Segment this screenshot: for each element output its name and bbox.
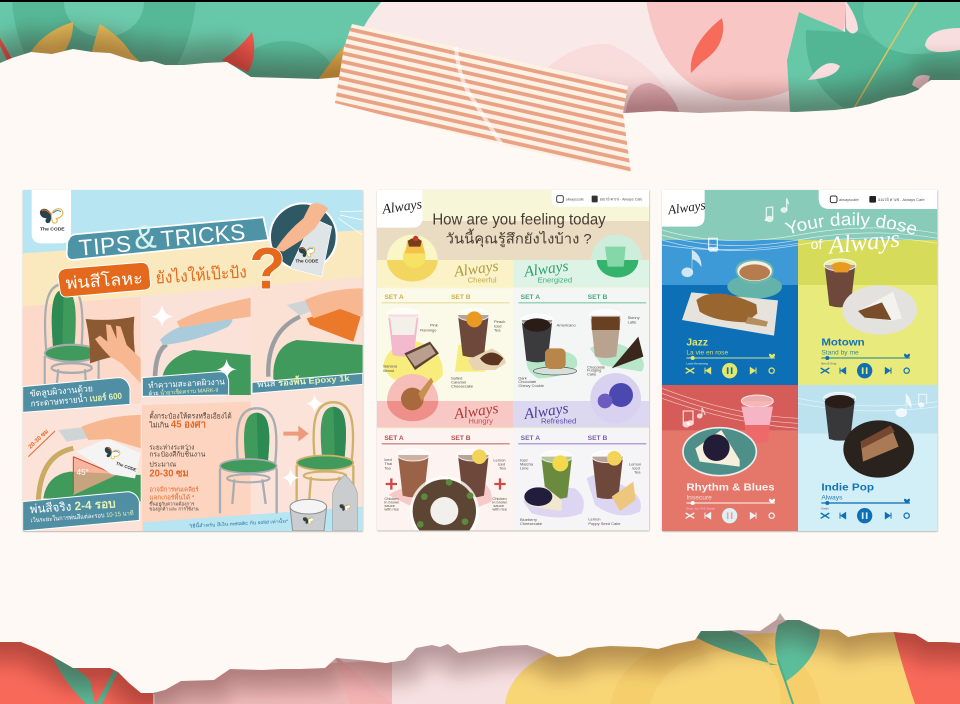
hungry and refreshed labels (384, 457, 641, 526)
hungry and refreshed labels: Chicken (492, 496, 507, 501)
washi tape (335, 24, 631, 173)
social links (819, 190, 937, 209)
step three illustration (268, 288, 363, 384)
jazz food photo (682, 259, 782, 336)
refreshed heading: Refreshed (541, 417, 576, 426)
refreshed mascot (590, 373, 641, 424)
tips and tricks banner: & (132, 218, 158, 257)
set labels and dividers: SET A (521, 294, 540, 301)
hungry and refreshed labels: with rice (492, 506, 508, 511)
spray instructions text (148, 410, 232, 513)
cheerful and energized labels: Fudging (587, 368, 601, 373)
rhythm food photo (683, 395, 773, 476)
step three caption (252, 371, 363, 393)
step four spraying illustration: The CODE (115, 461, 137, 473)
step one caption: ขัดลูบผิวงานด้วย (29, 383, 93, 400)
hungry food set (386, 449, 506, 546)
cheerful and energized labels: Americano (557, 323, 576, 328)
step one caption (23, 378, 130, 412)
spray instructions text: ตั้งกระป๋องให้ตรงหรือเอียงได้ (149, 410, 232, 420)
step two caption: ด้วย น้ำยาเช็ดคราบ MARK-II (148, 385, 219, 397)
cheerful and energized labels (383, 315, 640, 388)
hungry heading (452, 400, 499, 426)
menu background blocks (377, 190, 649, 530)
The CODE logo box (32, 190, 71, 243)
motown food photo (824, 259, 917, 335)
music menu background blocks (662, 190, 937, 531)
cheerful and energized labels: Dark (518, 375, 527, 380)
step four caption: พ่นสีจริง 2-4 รอบ (29, 496, 116, 516)
spray instructions text: แลกเกอร์พื้นได้ * (149, 493, 195, 502)
music staff lines (662, 228, 937, 428)
spray rays (338, 211, 363, 235)
set labels and dividers: SET B (451, 294, 471, 301)
title (784, 212, 916, 254)
orange subtitle tag: พ่นสีโลหะ (65, 269, 143, 293)
spray instructions text: อาจมีการพ่นเคลียร์ (149, 486, 199, 494)
logo box (377, 190, 423, 228)
indie pop food photo (824, 392, 914, 478)
cheerful and energized labels: Salted (451, 376, 462, 381)
music notes (682, 198, 927, 427)
tips and tricks banner: TRICKS (160, 219, 247, 252)
rhythm and blues player: Insecure (686, 494, 712, 501)
cheerful food set (383, 308, 506, 385)
step four spraying illustration: 20-30 ซม (27, 428, 50, 450)
hungry and refreshed labels: sauce (384, 503, 396, 508)
refreshed heading (522, 400, 576, 426)
title: Your daily dose (784, 212, 916, 234)
energized heading (524, 264, 572, 284)
panel: The CODE tips and tricks poster (23, 190, 363, 531)
hungry and refreshed labels: Tea (634, 469, 641, 474)
poster background bands (23, 190, 363, 531)
menu title: How are you feeling today (432, 211, 606, 228)
spray instructions text: ไม่เกิน 45 องศา (148, 420, 206, 431)
panel: Always cafe feeling menu (377, 190, 649, 546)
motown player: Motown (821, 338, 865, 349)
spray instructions text: ของลูกค้า และ การใช้งาน (149, 506, 199, 513)
hungry and refreshed labels: Matcha (520, 462, 534, 467)
step three caption: พ่นสี รองพื้น Epoxy 1k (257, 371, 350, 389)
paint can and spray can (290, 475, 357, 531)
hungry and refreshed labels: Lemon (493, 458, 506, 463)
hungry and refreshed labels: in brown (492, 500, 507, 505)
social links: ออเว่ย์ คาเฟ่ - Always Cafe (600, 197, 642, 202)
social links: ออเว่ย์ คาเฟ่ - Always Cafe (878, 197, 925, 202)
hungry and refreshed labels: Tea (384, 465, 392, 470)
energized mascot (591, 235, 642, 277)
cheerful heading (454, 264, 498, 282)
spray instructions text: 20-30 ซม (149, 468, 189, 479)
motown player (821, 338, 910, 378)
spray instructions text: ขึ้นอยู่กับความต้องการ (149, 501, 195, 508)
hungry and refreshed labels: Cheesecake (520, 521, 543, 526)
step two caption: ทำความสะอาดผิวงาน (148, 376, 225, 390)
cheerful and energized labels: Cheesecake (451, 383, 474, 388)
spray can badge (270, 203, 337, 277)
indie pop player: Always (821, 494, 843, 501)
refreshed food set (522, 451, 641, 517)
step four caption (23, 492, 139, 531)
hungry and refreshed labels: sauce (493, 503, 505, 508)
set labels and dividers: SET A (384, 294, 404, 301)
gold chair (297, 402, 353, 512)
rhythm and blues player: Brian Joy, Phil Swindt (686, 506, 715, 510)
cheerful and energized labels: Pink (430, 323, 438, 328)
menu title: วันนี้คุณรู้สึกยังไงบ้าง ? (446, 228, 592, 247)
cheerful and energized labels: Skinny (628, 315, 640, 320)
cheerful and energized labels: Bread (383, 368, 394, 373)
rhythm and blues player (686, 483, 775, 523)
cheerful and energized labels: Caramel (451, 379, 466, 384)
social links (552, 190, 649, 207)
cheerful and energized labels: Chocolate (587, 364, 606, 369)
set labels and dividers: SET A (521, 435, 540, 442)
motown player: Stand by me (821, 349, 859, 356)
cheerful and energized labels: Latte (628, 320, 637, 325)
spray instructions text: ระยะห่างระหว่าง (149, 445, 194, 452)
spray can badge: The CODE (295, 258, 318, 263)
menu title (432, 211, 606, 247)
hungry heading: Hungry (468, 417, 493, 426)
hungry and refreshed labels: Iced (632, 465, 640, 470)
energized food set (521, 310, 644, 378)
hungry mascot (387, 374, 438, 421)
cheerful heading: Cheerful (468, 276, 497, 285)
subtitle text: ยังไงให้เป๊ะปัง (155, 262, 247, 288)
jazz player (686, 338, 775, 378)
cheerful and energized labels: Chocolate (518, 379, 537, 384)
jazz player: La vie en rose (686, 349, 728, 356)
indie pop player: Indie Pop (821, 483, 874, 494)
cheerful and energized labels: Iced (494, 323, 502, 328)
spray instructions text: กระป๋องสีกับชิ้นงาน (149, 447, 206, 458)
cheerful and energized labels: Flamingo (420, 328, 437, 333)
motown player: Ben E King (821, 361, 837, 365)
panel: Always daily dose music menu (662, 190, 938, 532)
hungry and refreshed labels: Iced (384, 457, 392, 462)
cheerful and energized labels: Chewy Cookie (518, 383, 545, 388)
hungry and refreshed labels: Thai (384, 461, 392, 466)
rhythm and blues player: Rhythm & Blues (686, 483, 775, 494)
step two caption (142, 372, 229, 397)
bottom torn artwork (0, 617, 960, 704)
chair with rag step one (44, 284, 100, 384)
title: of (811, 236, 822, 252)
indie pop player (821, 483, 910, 523)
hungry and refreshed labels: with rice (384, 506, 400, 511)
sparkles (282, 394, 324, 487)
top torn artwork (0, 0, 960, 129)
arrow (283, 426, 309, 442)
hungry and refreshed labels: Chicken (384, 496, 399, 501)
hungry and refreshed labels: Poppy Seed Cake (588, 521, 621, 526)
set labels and dividers: SET A (384, 435, 404, 442)
step four spraying illustration: 45° (77, 468, 89, 477)
hungry and refreshed labels: Lemon (629, 461, 641, 466)
question mark: ? (249, 236, 285, 301)
rag and hand (86, 317, 141, 383)
orange subtitle tag (58, 262, 151, 297)
set labels and dividers: SET B (588, 435, 607, 442)
hungry and refreshed labels: Lemon (588, 516, 601, 521)
step four caption: เว้นระยะในการพ่นสีแต่ละรอบ 10-15 นาที (30, 509, 134, 524)
hungry and refreshed labels: Iced (520, 458, 528, 463)
energized heading: Energized (538, 276, 572, 285)
tips and tricks banner (66, 216, 270, 261)
jazz player: Louis Armstrong (686, 361, 708, 365)
silver chair (220, 408, 277, 513)
jazz player: Jazz (686, 338, 708, 349)
step one caption: กระดาษทรายน้ำ เบอร์ 600 (30, 389, 123, 409)
title: Always (825, 225, 901, 260)
hungry and refreshed labels: Blueberry (520, 517, 537, 522)
set labels and dividers: SET B (588, 294, 607, 301)
social links: alwayscafe (839, 197, 859, 202)
hungry and refreshed labels: Iced (498, 462, 505, 467)
set labels and dividers: SET B (451, 435, 471, 442)
hungry and refreshed labels: in brown (384, 500, 399, 505)
step two illustration (151, 298, 251, 395)
logo box (662, 190, 706, 227)
The CODE logo box: The CODE (40, 226, 65, 232)
step four spraying illustration (27, 415, 141, 502)
hungry and refreshed labels: Tea (499, 466, 507, 471)
indie pop player: Keshi (821, 506, 829, 510)
tips and tricks banner: TIPS (78, 230, 133, 261)
footnote: วิธีนี้สำหรับ สีเงิน metallic กับ solid เท่านั้น* (189, 517, 288, 529)
top black edge (0, 0, 960, 2)
set labels and dividers (382, 294, 646, 444)
cheerful and energized labels: Cake (587, 372, 597, 377)
social links: alwayscafe (566, 198, 584, 202)
cheerful and energized labels: Tea (494, 328, 501, 333)
cheerful and energized labels: Banana (383, 364, 398, 369)
cheerful mascot (387, 235, 438, 282)
cheerful and energized labels: Peach (494, 319, 505, 324)
hungry and refreshed labels: Lime (520, 466, 529, 471)
spray instructions text: ประมาณ (149, 462, 177, 469)
